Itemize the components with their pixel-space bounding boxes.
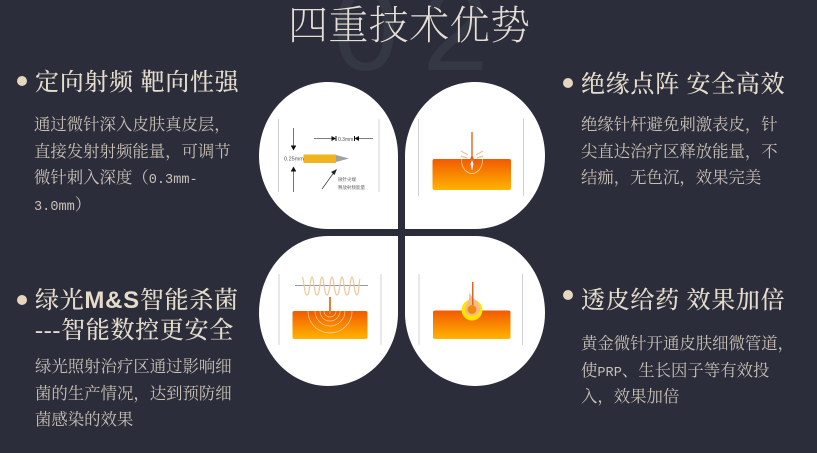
text: directional RF: 直接发射射频能量，可调节: [34, 142, 231, 160]
text: green light: 菌的生产情况，达到预防细: [35, 384, 232, 402]
title: 四重技术优势: [288, 3, 530, 48]
text: directional RF: [34, 115, 231, 214]
petal: insulated needle: [405, 82, 545, 229]
bullet: insulated lattice: [563, 78, 573, 88]
petal: needle dimensions: 微针尖端: [338, 176, 356, 183]
text: insulated lattice: 尖直达治疗区释放能量，不: [581, 142, 778, 160]
text: green light: [35, 357, 232, 429]
text: insulated lattice: [581, 115, 778, 187]
petal: needle dimensions: 0.25mm: [284, 156, 304, 162]
heading: green light: ---智能数控更安全: [35, 318, 234, 344]
text: green light: 绿光照射治疗区通过影响细: [35, 357, 232, 376]
heading: transdermal delivery: 透皮给药 效果加倍: [581, 288, 785, 314]
heading: directional RF: 定向射频 靶向性强: [35, 70, 239, 96]
bullet: green light: [17, 295, 27, 305]
petal: radio frequency waves: [259, 236, 398, 386]
bullet: transdermal delivery: [563, 290, 573, 300]
petal: needle dimensions: 0.3mm: [338, 137, 353, 143]
text: directional RF: 微针刺入深度（0.3mm-: [34, 168, 198, 188]
graphic: four petal cards: [259, 82, 545, 386]
text: green light: 菌感染的效果: [35, 410, 133, 429]
petal: needle dimensions: 释放射频能量: [338, 184, 365, 191]
text: insulated lattice: 绝缘针杆避免刺激表皮，针: [581, 115, 778, 134]
text: transdermal delivery: 使PRP、生长因子等有效投: [581, 360, 769, 380]
text: transdermal delivery: 黄金微针开通皮肤细微管道，: [581, 334, 794, 353]
petal: needle dimensions: [259, 82, 398, 229]
bullet: directional RF: [17, 76, 27, 86]
heading: green light: 绿光M&S智能杀菌: [35, 287, 239, 314]
text: transdermal delivery: 入，效果加倍: [581, 387, 679, 406]
text: insulated lattice: 结痂，无色沉，效果完美: [581, 168, 761, 187]
text: directional RF: 3.0mm）: [34, 194, 91, 214]
heading: green light: [35, 287, 239, 344]
petal: drug delivery: [405, 236, 545, 386]
text: transdermal delivery: [581, 334, 794, 406]
heading: insulated lattice: 绝缘点阵 安全高效: [581, 72, 785, 98]
text: directional RF: 通过微针深入皮肤真皮层，: [34, 115, 231, 134]
